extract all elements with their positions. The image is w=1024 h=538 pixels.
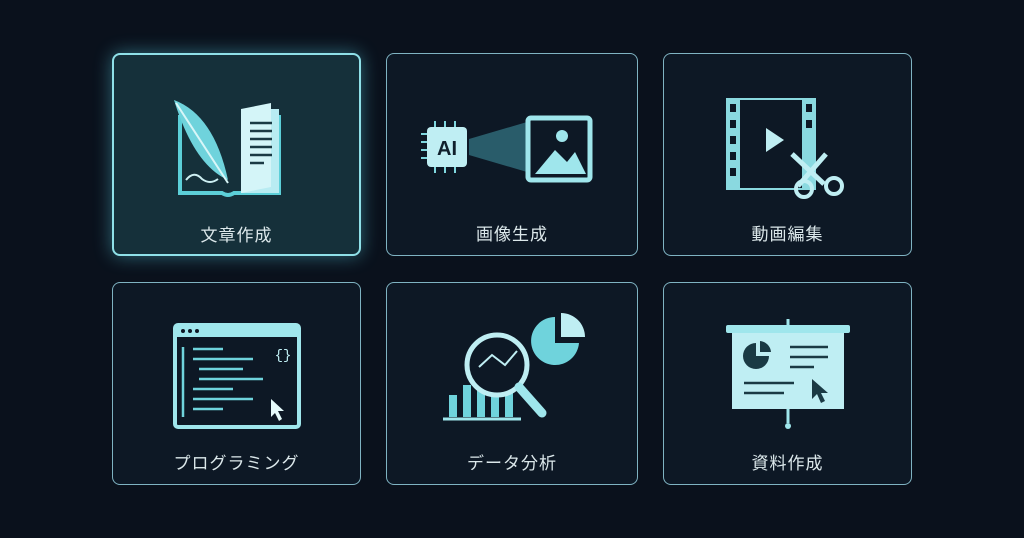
- card: 文章作成: [112, 53, 361, 256]
- card: 画像生成: [386, 53, 638, 256]
- icon: code window: {}: [275, 348, 291, 364]
- icon: AI chip to image: AI: [437, 138, 457, 160]
- card: 資料作成: 資料作成: [752, 454, 824, 473]
- card: 資料作成: [663, 282, 912, 485]
- card: 動画編集: 動画編集: [752, 225, 824, 244]
- card: プログラミング: プログラミング: [174, 454, 300, 473]
- card: 画像生成: 画像生成: [476, 225, 548, 244]
- icon: quill and book: [174, 100, 281, 197]
- card: 動画編集: [663, 53, 912, 256]
- card: データ分析: データ分析: [467, 454, 557, 473]
- icon: code window: [173, 323, 301, 429]
- card: データ分析: [386, 282, 638, 485]
- icon: film and scissors: [726, 98, 844, 199]
- card: 文章作成: 文章作成: [200, 226, 272, 245]
- card: プログラミング: [112, 282, 361, 485]
- icon: AI chip to image: [421, 116, 592, 182]
- icon: presentation board: [726, 319, 850, 429]
- icon: magnifier chart: [443, 313, 585, 420]
